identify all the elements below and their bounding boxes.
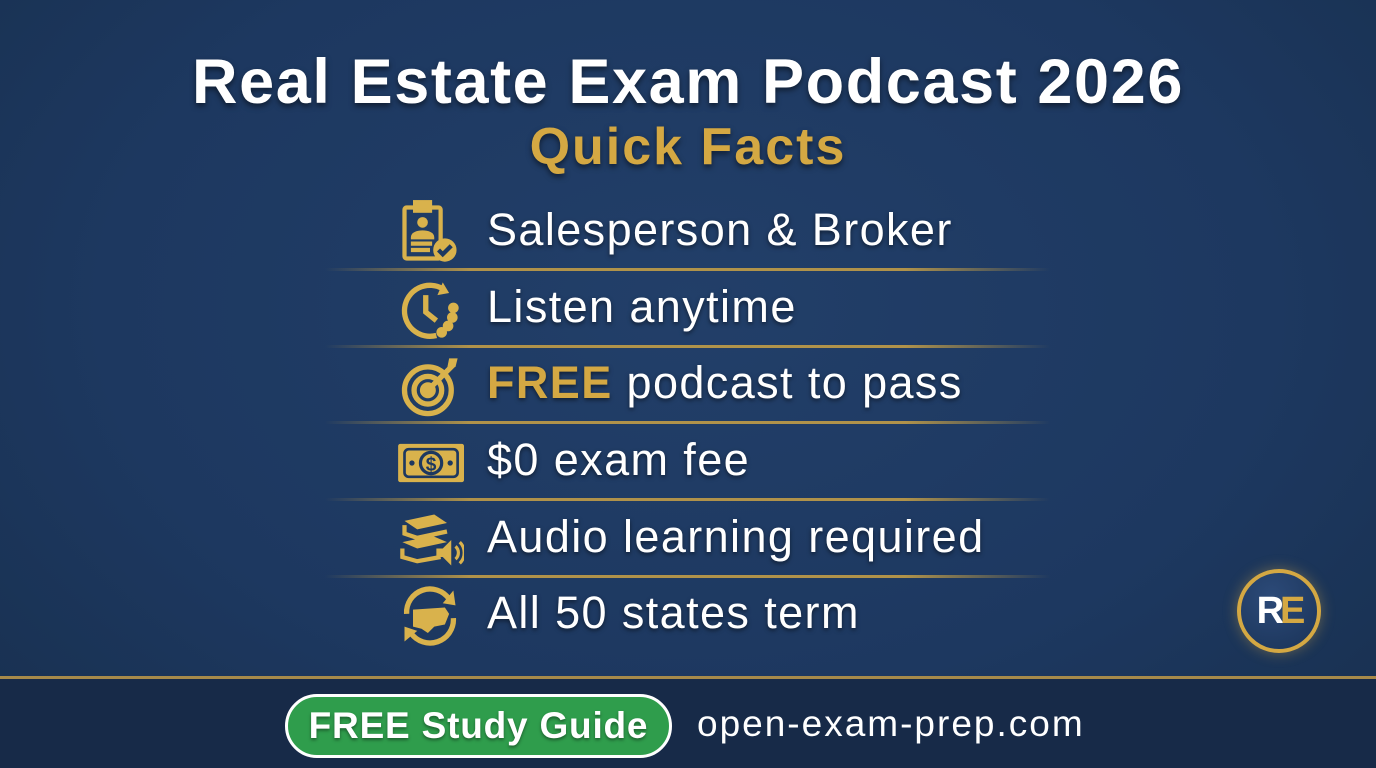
fact: salesperson & broker	[402, 200, 953, 262]
icon: target	[402, 358, 458, 416]
fact: free podcast: FREE podcast to pass	[487, 357, 963, 408]
icon: dollar bill: $	[426, 454, 437, 475]
subtitle: Quick Facts	[530, 118, 846, 176]
icon: US map with arrows	[404, 586, 456, 646]
fact: all 50 states: All 50 states term	[487, 587, 860, 638]
icon: dollar bill	[398, 444, 464, 482]
logo badge: RE	[1257, 590, 1301, 632]
fact: exam fee: $0 exam fee	[487, 434, 750, 485]
fact: salesperson & broker: Salesperson & Broker	[487, 204, 953, 255]
button: free study guide	[285, 694, 672, 758]
fact: listen anytime: Listen anytime	[487, 281, 797, 332]
fact: all 50 states	[404, 586, 860, 646]
title: Real Estate Exam Podcast 2026	[192, 47, 1184, 117]
icon: clock	[402, 282, 459, 339]
icon: clipboard	[402, 200, 457, 262]
button: free study guide: FREE Study Guide	[309, 705, 648, 746]
fact: audio learning: Audio learning required	[487, 511, 985, 562]
icon: books with speaker	[400, 514, 464, 566]
url: open-exam-prep.com	[697, 703, 1085, 744]
fact: listen anytime	[402, 281, 797, 339]
footer	[0, 676, 1376, 768]
logo badge	[1237, 569, 1321, 653]
